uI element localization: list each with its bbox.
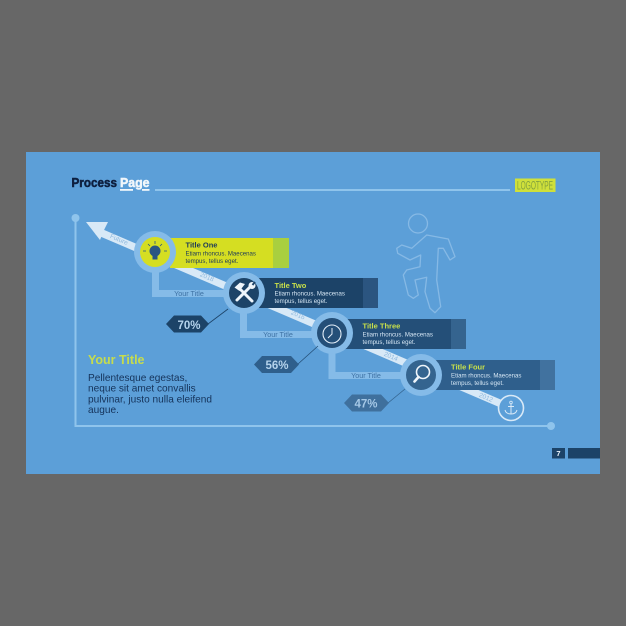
arrow: timeline: 2012 [478,392,494,404]
panel: slide background [26,152,600,474]
badge: 47%: 47% [354,398,378,410]
title: Process [72,176,117,190]
connector lines [156,260,420,376]
icon: running figure [397,214,455,313]
text block: your title: Your Title [88,353,145,367]
axis [72,214,555,430]
panel: title three: Etiam rhoncus. Maecenas [362,332,433,338]
connector labels: Your Title [351,371,381,380]
logotype: LOGOTYPE [517,180,553,192]
panel: title one [170,238,289,268]
arrow: timeline: 2014 [383,351,399,363]
icon: clock node [311,312,353,354]
panel: title four: tempus, tellus eget. [451,380,504,387]
text block: your title [88,353,212,416]
panel: title two [250,278,378,308]
text block: your title: augue. [88,405,119,416]
panel: title two: Title Two [274,281,307,290]
title [72,176,150,191]
panel: title four: Title Four [451,362,485,372]
arrow: timeline [86,222,511,408]
badge: 56%: 56% [265,360,289,372]
panel: title two: tempus, tellus eget. [274,298,328,305]
icon: anchor node [498,396,524,420]
icon: magnifier node [400,354,442,396]
badge: 70% [166,309,228,332]
text block: your title: neque sit amet convallis [88,384,196,395]
page number: 7 [556,449,561,458]
arrow: timeline: 2018 [199,271,215,284]
connector labels: Your Title [263,330,293,339]
badge: 70%: 70% [177,320,201,332]
badge: 56% [254,346,318,373]
panel: title three: Title Three [362,322,400,330]
connector labels [174,289,381,380]
icon: light bulb node [134,231,176,273]
panel: title one: Title One [186,240,217,250]
icon: tools node [223,272,265,314]
connector labels: Your Title [174,289,204,298]
panel: title two: Etiam rhoncus. Maecenas [274,290,345,298]
text block: your title: pulvinar, justo nulla eleifend [88,394,212,405]
panel: title three [340,319,466,349]
title: Page [120,176,150,190]
logotype [515,178,556,192]
panel: title one: Etiam rhoncus. Maecenas [186,250,256,258]
panel: title three: tempus, tellus eget. [362,339,416,346]
text block: your title: Pellentesque egestas, [88,373,187,384]
panel: title one: tempus, tellus eget. [186,258,239,265]
panel: title four [430,360,555,390]
arrow: timeline: Future [109,233,129,247]
arrow: timeline: 2016 [290,309,306,322]
panel: title four: Etiam rhoncus. Maecenas [451,372,521,380]
badge: 47% [344,389,405,412]
page number [552,448,600,458]
